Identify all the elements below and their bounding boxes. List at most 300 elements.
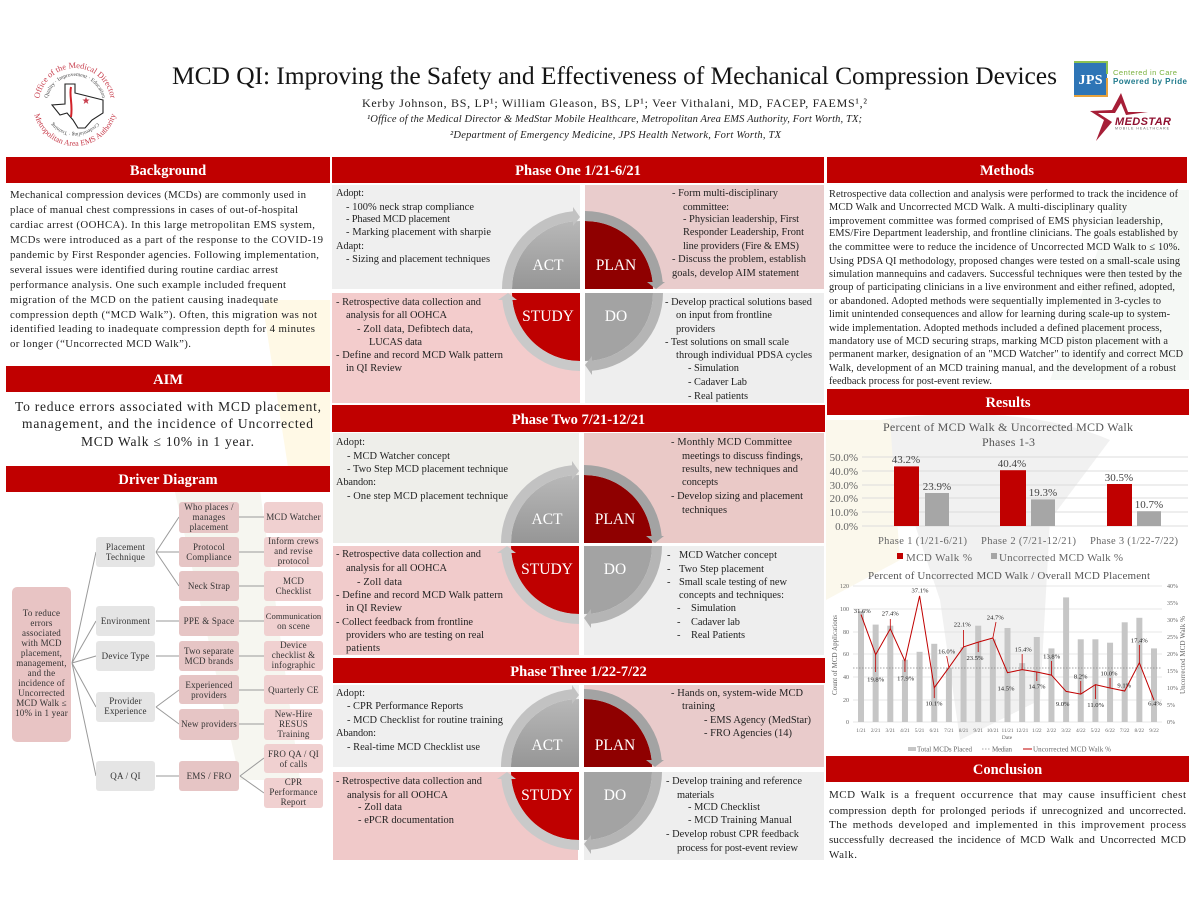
combo chart: uncorrected MCD walk over time: 8.2% — [1074, 674, 1088, 681]
PDSA cycle: DO — [604, 561, 626, 578]
combo chart: uncorrected MCD walk over time: 9/21 — [973, 728, 983, 734]
text: study: - Zoll data — [357, 577, 402, 588]
panel: conclusion — [826, 756, 1189, 861]
text: do: - MCD Training Manual — [688, 815, 792, 826]
driver: change ideas: RESUS — [279, 719, 308, 729]
combo chart: uncorrected MCD walk over time: 24.7% — [987, 614, 1004, 621]
text block: methods: the committee were to reduce the incidence of Uncorrected MCD Walk to ≤ 10%. — [829, 242, 1180, 253]
text: plan: - FRO Agencies (14) — [704, 728, 792, 739]
text block: methods: group of participating clinicians in a live environment and either refined, adopted, — [829, 282, 1175, 293]
text block: methods: improvement committee was formed comprised of EMS physician leadership, — [829, 216, 1163, 227]
text block: methods: wide implementation. Adopted methods included a defined placement process, — [829, 323, 1162, 334]
driver: secondary drivers: EMS / FRO — [187, 771, 232, 781]
combo chart: uncorrected MCD walk over time: Median — [992, 746, 1012, 754]
driver: primary drivers: Environment — [101, 616, 150, 626]
text: study: patients — [346, 643, 380, 654]
bar chart: percent of MCD walk by phase: Uncorrected MCD Walk % — [999, 552, 1123, 564]
PDSA cycle: DO — [605, 308, 627, 325]
combo chart: uncorrected MCD walk over time: 10/21 — [987, 728, 999, 734]
authors: Kerby Johnson, BS, LP¹; William Gleason, BS, LP¹; Veer Vithalani, MD, FACEP, FAEMS¹,² — [362, 96, 867, 110]
combo chart: uncorrected MCD walk over time: 9/22 — [1149, 728, 1159, 734]
panel: AIM — [6, 366, 330, 449]
heading: phase one — [332, 157, 824, 183]
combo chart: uncorrected MCD walk over time: 19.8% — [867, 676, 885, 683]
text: plan — [672, 188, 807, 279]
combo chart: uncorrected MCD walk over time: 10.1% — [925, 701, 943, 708]
combo chart: uncorrected MCD walk over time: 4/22 — [1076, 728, 1086, 734]
panel: methods — [827, 157, 1187, 387]
text: act: - MCD Checklist for routine training — [347, 715, 503, 726]
driver: primary drivers: Experience — [104, 706, 147, 716]
text: plan: - Form multi-disciplinary — [672, 188, 779, 199]
text: plan: - EMS Agency (MedStar) — [704, 715, 811, 726]
driver: root aim: MCD Walk ≤ — [16, 698, 67, 708]
combo chart: uncorrected MCD walk over time: 80 — [843, 630, 849, 636]
text: act: Adopt: — [336, 437, 365, 448]
driver: secondary drivers: PPE & Space — [184, 616, 234, 626]
text block: AIM statement: MCD Walk ≤ 10% in 1 year. — [81, 434, 254, 449]
header: logo Office of the Medical Director — [34, 62, 116, 146]
text block: methods: mandatory use of MCD securing straps, marking MCD piston placement with a — [829, 336, 1168, 347]
driver: primary drivers — [96, 537, 155, 791]
driver: secondary drivers: Who places / — [184, 502, 234, 512]
driver: root aim: with MCD — [21, 638, 62, 648]
text block: methods: feedback process for post-event review. — [829, 376, 992, 387]
text: plan — [671, 437, 803, 516]
text: study — [336, 297, 504, 374]
text block: background: several issues were identified during routine cardiac arrest — [10, 264, 278, 276]
text: act: - Phased MCD placement — [346, 214, 450, 225]
text: act: Abandon: — [336, 477, 376, 488]
text: act: - MCD Watcher concept — [347, 451, 450, 462]
text block: background: pandemic by First Responder agencies. Following implementation, — [10, 249, 319, 261]
text: study: analysis for all OOHCA — [346, 563, 447, 574]
text block: AIM statement — [15, 399, 321, 449]
combo chart: uncorrected MCD walk over time: 120 — [840, 584, 849, 590]
logo: JPS Health Network: JPS — [1078, 73, 1103, 88]
text: act: - One step MCD placement technique — [347, 491, 508, 502]
title: MCD QI: Improving the Safety and Effectiveness of Mechanical Compression Devices — [172, 61, 1057, 90]
affiliation 1: ¹Office of the Medical Director & MedStar Mobile Healthcare, Metropolitan Area EMS Authority, Fort Worth, TX; — [367, 114, 862, 125]
driver: root aim: errors — [30, 618, 53, 628]
heading: phase three: Phase Three 1/22-7/22 — [510, 664, 647, 680]
PDSA cycle: PLAN — [596, 257, 636, 274]
combo chart: uncorrected MCD walk over time: 5/22 — [1091, 728, 1100, 734]
bar chart: percent of MCD walk by phase: 40.4% — [998, 458, 1026, 470]
driver: root aim: Uncorrected — [18, 688, 65, 698]
heading: AIM — [6, 366, 330, 392]
driver: change ideas: protocol — [278, 556, 310, 566]
driver: primary drivers: Device Type — [102, 651, 149, 661]
combo chart: uncorrected MCD walk over time: 30% — [1167, 618, 1178, 624]
text: plan: Responder Leadership, Front — [683, 227, 804, 238]
text: do: - Simulation — [688, 363, 740, 374]
bar chart: percent of MCD walk by phase: MCD Walk % — [906, 552, 972, 564]
bar chart: percent of MCD walk by phase: 40.0% — [830, 466, 858, 478]
text block: methods: EMS/Fire Department leadership, and frontline clinicians. The goals established by — [829, 228, 1179, 239]
driver: secondary drivers: providers — [191, 690, 227, 700]
text: study — [336, 776, 483, 826]
text: act: - Real-time MCD Checklist use — [347, 742, 480, 753]
text: study: - Retrospective data collection and — [336, 297, 482, 308]
text: act: Abandon: — [336, 728, 376, 739]
combo chart: uncorrected MCD walk over time: 16.0% — [938, 649, 956, 656]
PDSA cycle — [497, 461, 664, 628]
combo chart: uncorrected MCD walk over time: Uncorrected MCD Walk % — [1033, 746, 1111, 754]
combo chart: uncorrected MCD walk over time: 60 — [843, 652, 849, 658]
driver: primary drivers: Technique — [106, 552, 145, 562]
driver: change ideas: Communication — [266, 611, 322, 621]
panel: phase three — [333, 658, 825, 860]
text: study: in QI Review — [346, 603, 402, 614]
PDSA cycle: ACT — [532, 257, 564, 274]
driver: root aim: 10% in 1 year — [15, 708, 68, 718]
text block: methods: limit unintended consequences and allow for learning during scale-up to system- — [829, 309, 1171, 320]
text block: conclusion: successfully decreased the incidence of MCD Walk and Uncorrected MCD — [829, 834, 1186, 846]
driver: root aim: incidence of — [18, 678, 65, 688]
text: do: - Test solutions on small scale — [665, 337, 789, 348]
text block: background: Mechanical compression devices (MCDs) are commonly used in — [10, 189, 307, 201]
header: logo Office of the Medical Director: Office of the Medical Director — [34, 62, 114, 98]
combo chart: uncorrected MCD walk over time: 40% — [1167, 584, 1178, 590]
text block: background: performance analysis. One such example included frequent — [10, 279, 286, 291]
PDSA cycle: STUDY — [521, 787, 573, 804]
text: study: analysis for all OOHCA — [346, 310, 447, 321]
combo chart: uncorrected MCD walk over time: 100 — [840, 607, 849, 613]
PDSA cycle: PLAN — [595, 511, 635, 528]
text block: conclusion: Walk. — [829, 849, 857, 861]
text: study: analysis for all OOHCA — [347, 790, 448, 801]
text block: methods: Retrospective data collection and analysis were performed to track the incidence of — [829, 189, 1179, 200]
combo chart: uncorrected MCD walk over time: 14.5% — [997, 685, 1015, 692]
text block: conclusion: compression depth for prolonged periods if unrecognized and uncorrected. — [829, 805, 1186, 817]
driver: root aim: placement, — [21, 648, 62, 658]
text: do: - Develop robust CPR feedback — [666, 829, 800, 840]
panel: background — [6, 157, 330, 350]
combo chart: uncorrected MCD walk over time: 3/22 — [1061, 728, 1071, 734]
heading: phase two: Phase Two 7/21-12/21 — [512, 412, 645, 428]
combo chart: uncorrected MCD walk over time: 12/21 — [1016, 728, 1029, 734]
panel: results — [827, 389, 1189, 754]
combo chart: uncorrected MCD walk over time: 0% — [1167, 720, 1175, 726]
text: do: on input from frontline — [676, 310, 772, 321]
bar chart: percent of MCD walk by phase: 50.0% — [830, 452, 858, 464]
logo: MedStar — [1090, 93, 1171, 141]
text: act: Adopt: — [336, 188, 364, 199]
text block: background: cardiac arrest (OOHCA). In this large metropolitan EMS system, — [10, 219, 315, 231]
text block: background: or longer (“Uncorrected MCD Walk”). — [10, 338, 191, 350]
combo chart: uncorrected MCD walk over time: Date — [1002, 735, 1013, 741]
text: do: MCD Watcher concept — [679, 550, 777, 561]
text block: background: MCDs were introduced as a part of the response to the COVID-19 — [10, 234, 323, 246]
driver: change ideas: New-Hire — [275, 709, 312, 719]
combo chart: uncorrected MCD walk over time: 17.4% — [1131, 637, 1148, 644]
text: plan: training — [682, 701, 715, 712]
bar chart: percent of MCD walk by phase — [830, 420, 1188, 564]
text block: AIM statement: management, and the incidence of Uncorrected — [22, 416, 313, 431]
driver: change ideas: of calls — [280, 759, 308, 769]
PDSA cycle — [498, 207, 665, 375]
combo chart: uncorrected MCD walk over time: 10.0% — [1100, 670, 1118, 677]
bar chart: percent of MCD walk by phase: 30.5% — [1105, 472, 1133, 484]
combo chart: uncorrected MCD walk over time: 1/22 — [1032, 728, 1042, 734]
panel: driver diagram — [6, 466, 330, 808]
text: study: - Collect feedback from frontline — [336, 617, 473, 628]
bar chart: percent of MCD walk by phase: Phase 3 (1/22-7/22) — [1090, 536, 1178, 547]
text block: methods — [829, 189, 1184, 387]
combo chart: uncorrected MCD walk over time: 11/21 — [1001, 728, 1014, 734]
text: do: - Develop practical solutions based — [665, 297, 813, 308]
driver: root aim: associated — [22, 628, 61, 638]
bar chart: percent of MCD walk by phase: 0.0% — [835, 521, 858, 533]
text: act — [336, 437, 508, 502]
bar chart: percent of MCD walk by phase: 20.0% — [830, 493, 858, 505]
driver: change ideas: MCD Watcher — [266, 512, 321, 522]
text: act — [336, 688, 503, 753]
text: do: - — [677, 603, 681, 614]
text block: methods: MCD Walk and Uncorrected MCD Walk. A multi-disciplinary quality — [829, 202, 1128, 213]
driver: change ideas — [264, 502, 323, 808]
text: act: - Marking placement with sharpie — [346, 227, 491, 238]
heading: phase two — [332, 405, 825, 432]
text: plan: - Monthly MCD Committee — [671, 437, 792, 448]
panel: phase one — [332, 157, 824, 403]
driver: secondary drivers: Neck Strap — [188, 581, 230, 591]
header: logo Office of the Medical Director: Credentialing · Training — [51, 122, 99, 136]
header: logo Office of the Medical Director: Metropolitan Area EMS Authority — [34, 113, 116, 146]
driver: secondary drivers: manages — [193, 512, 226, 522]
text block: conclusion: MCD Walk is a frequent occurrence that may cause insufficient chest — [829, 789, 1186, 801]
driver: root aim — [12, 587, 71, 742]
heading: phase three — [333, 658, 825, 683]
driver: change ideas: Report — [281, 797, 307, 807]
combo chart: uncorrected MCD walk over time: 6/22 — [1105, 728, 1115, 734]
text block: conclusion — [829, 789, 1186, 861]
PDSA cycle: ACT — [532, 737, 563, 754]
driver: change ideas: MCD — [283, 576, 304, 586]
bar chart: percent of MCD walk by phase: Phase 1 (1/21-6/21) — [878, 536, 968, 547]
text: study: in QI Review — [346, 363, 402, 374]
bar chart: percent of MCD walk by phase: 30.0% — [830, 480, 858, 492]
text: plan: line providers (Fire & EMS) — [683, 241, 799, 252]
logo: JPS Health Network: Powered by Pride — [1113, 77, 1188, 86]
text: plan: techniques — [682, 505, 727, 516]
text: do: providers — [676, 324, 715, 335]
combo chart: uncorrected MCD walk over time: 10% — [1167, 686, 1178, 692]
combo chart: uncorrected MCD walk over time: 9.1% — [1117, 683, 1132, 690]
driver: primary drivers: QA / QI — [110, 771, 141, 781]
text: plan: - Hands on, system-wide MCD — [671, 688, 803, 699]
bar chart: percent of MCD walk by phase: 10.0% — [830, 507, 858, 519]
combo chart: uncorrected MCD walk over time: 5% — [1167, 703, 1175, 709]
heading: methods — [827, 157, 1187, 183]
text: do: materials — [677, 790, 714, 801]
driver: root aim: management, — [16, 658, 67, 668]
heading: conclusion: Conclusion — [973, 762, 1042, 778]
combo chart: uncorrected MCD walk over time: 5/21 — [915, 728, 925, 734]
text block: background: migration of the MCD on the patient causing inadequate — [10, 294, 278, 306]
text: do: - — [677, 617, 681, 628]
text: plan: committee: — [683, 202, 729, 213]
combo chart: uncorrected MCD walk over time: 0 — [846, 720, 849, 726]
combo chart: uncorrected MCD walk over time: 7/21 — [944, 728, 954, 734]
PDSA cycle: STUDY — [521, 561, 573, 578]
text block: AIM statement: To reduce errors associated with MCD placement, — [15, 399, 321, 414]
heading: background — [6, 157, 330, 183]
combo chart: uncorrected MCD walk over time: 7/22 — [1120, 728, 1130, 734]
driver: primary drivers: Placement — [106, 542, 145, 552]
driver: change ideas: Device — [280, 640, 307, 650]
text: plan: goals, develop AIM statement — [672, 268, 799, 279]
text block: background: compression depth (“MCD Walk”). Often, this migration was not — [10, 309, 317, 321]
text: do: Cadaver lab — [691, 617, 740, 628]
bar chart: percent of MCD walk by phase: 10.7% — [1135, 499, 1163, 511]
text: do: Simulation — [691, 603, 737, 614]
bar chart: percent of MCD walk by phase: 19.3% — [1029, 487, 1057, 499]
heading: AIM: AIM — [153, 372, 183, 388]
heading: driver diagram: Driver Diagram — [118, 472, 218, 488]
text: do: - — [667, 577, 671, 588]
text: act: - 100% neck strap compliance — [346, 202, 474, 213]
text: plan: - Discuss the problem, establish — [672, 254, 807, 265]
driver: root aim: and the — [28, 668, 55, 678]
text: do: - Cadaver Lab — [688, 377, 747, 388]
combo chart: uncorrected MCD walk over time: 3/21 — [886, 728, 895, 734]
combo chart: uncorrected MCD walk over time: 11.0% — [1087, 702, 1105, 709]
driver: secondary drivers: MCD brands — [185, 656, 234, 666]
driver: change ideas: Checklist — [276, 586, 312, 596]
text: study: - Retrospective data collection and — [336, 549, 482, 560]
text block: methods: Walk, development of an MCD training manual, and the development of a robust — [829, 363, 1176, 374]
PDSA cycle: PLAN — [595, 737, 635, 754]
text: plan: - Develop sizing and placement — [671, 491, 803, 502]
logo: JPS Health Network — [1074, 62, 1188, 96]
combo chart: uncorrected MCD walk over time: Count of MCD Applications — [831, 615, 839, 695]
text: plan: meetings to discuss findings, — [682, 451, 803, 462]
bar chart: percent of MCD walk by phase: Phases 1-3 — [982, 435, 1035, 449]
quadrant backgrounds — [332, 185, 824, 403]
panel: phase two — [332, 405, 825, 655]
text block: background: place of manual chest compressions in cases of out-of-hospital — [10, 204, 298, 216]
text block: methods: simulation mannequins and cadavers. Successful techniques were then tested by the — [829, 269, 1182, 280]
PDSA cycle: ACT — [532, 511, 563, 528]
driver: change ideas: Performance — [269, 787, 318, 797]
text block: methods: Using PDSA QI methodology, proposed changes were tested on a small-scale using — [829, 256, 1180, 267]
text: study: - ePCR documentation — [358, 815, 455, 826]
driver: change ideas: and revise — [274, 546, 313, 556]
text block: background — [10, 189, 323, 350]
text: do: - MCD Checklist — [688, 802, 760, 813]
combo chart: uncorrected MCD walk over time — [831, 570, 1187, 754]
text block: conclusion: The methods developed and implemented in this improvement process — [829, 819, 1186, 831]
combo chart: uncorrected MCD walk over time: Uncorrected MCD Walk % — [1179, 616, 1187, 694]
logo: MedStar: MOBILE HEALTHCARE — [1115, 126, 1170, 130]
text: act: Adapt: — [336, 241, 364, 252]
driver: root aim: To reduce — [23, 608, 60, 618]
text: plan — [671, 688, 811, 739]
text: study: - Zoll data, Defibtech data, — [357, 324, 473, 335]
heading: driver diagram — [6, 466, 330, 492]
combo chart: uncorrected MCD walk over time: 4/21 — [900, 728, 910, 734]
text: act: - CPR Performance Reports — [347, 701, 463, 712]
text: do: Small scale testing of new — [679, 577, 787, 588]
text: act — [336, 188, 491, 265]
heading: results — [827, 389, 1189, 415]
text: do: Two Step placement — [679, 564, 764, 575]
combo chart: uncorrected MCD walk over time: 31.6% — [854, 608, 871, 615]
text: plan: - Physician leadership, First — [683, 214, 799, 225]
logo: MedStar: MEDSTAR — [1115, 116, 1171, 128]
driver: secondary drivers — [179, 502, 239, 791]
text: study: - Zoll data — [358, 802, 402, 813]
combo chart: uncorrected MCD walk over time: 37.1% — [911, 588, 929, 595]
combo chart: uncorrected MCD walk over time: 9.0% — [1056, 701, 1070, 708]
text: study: - Retrospective data collection and — [336, 776, 483, 787]
driver: change ideas: on scene — [277, 621, 310, 631]
affiliation 2: ²Department of Emergency Medicine, JPS Health Network, Fort Worth, TX — [450, 130, 782, 141]
text: study — [336, 549, 504, 654]
combo chart: uncorrected MCD walk over time: 15.4% — [1015, 647, 1032, 654]
PDSA cycle — [497, 685, 664, 854]
heading: phase one: Phase One 1/21-6/21 — [515, 163, 641, 179]
text: do: concepts and techniques: — [679, 590, 784, 601]
text: do — [666, 776, 802, 854]
text: do: through individual PDSA cycles — [676, 350, 812, 361]
driver: change ideas: FRO QA / QI — [268, 749, 319, 759]
combo chart: uncorrected MCD walk over time: 27.4% — [882, 611, 899, 618]
combo chart: uncorrected MCD walk over time: 13.8% — [1043, 654, 1061, 661]
combo chart: uncorrected MCD walk over time: 20% — [1167, 652, 1178, 658]
text: act: - Sizing and placement techniques — [346, 254, 490, 265]
driver: secondary drivers: Protocol — [193, 542, 225, 552]
driver: secondary drivers: placement — [190, 522, 229, 532]
text: do — [667, 550, 787, 641]
combo chart: uncorrected MCD walk over time: Percent of Uncorrected MCD Walk / Overall MCD Placement — [868, 570, 1150, 582]
combo chart: uncorrected MCD walk over time: Total MCDs Placed — [917, 746, 972, 754]
combo chart: uncorrected MCD walk over time: 22.1% — [954, 621, 971, 628]
text: act: Adopt: — [336, 688, 365, 699]
driver: change ideas: infographic — [272, 660, 315, 670]
driver: change ideas: Training — [277, 729, 310, 739]
quadrant backgrounds — [333, 685, 824, 860]
text: study: LUCAS data — [369, 337, 422, 348]
combo chart: uncorrected MCD walk over time: 25% — [1167, 635, 1178, 641]
PDSA cycle: STUDY — [522, 308, 574, 325]
combo chart: uncorrected MCD walk over time: 23.5% — [966, 655, 984, 662]
driver: change ideas: checklist & — [272, 650, 315, 660]
text block: methods: or abandoned. Adopted methods were sequentially implemented in 3-cycles to — [829, 296, 1161, 307]
connectors — [72, 517, 264, 793]
combo chart: uncorrected MCD walk over time: 35% — [1167, 601, 1178, 607]
bar chart: percent of MCD walk by phase: Percent of MCD Walk & Uncorrected MCD Walk — [883, 420, 1133, 434]
text: do: - Develop training and reference — [666, 776, 802, 787]
driver: change ideas: Quarterly CE — [268, 685, 319, 695]
driver: secondary drivers: New providers — [181, 719, 237, 729]
logo: JPS Health Network: Centered in Care — [1113, 68, 1177, 77]
bar chart: percent of MCD walk by phase: 43.2% — [892, 454, 920, 466]
PDSA cycle: DO — [604, 787, 626, 804]
text: do: - — [677, 630, 681, 641]
bar chart: percent of MCD walk by phase: Phase 2 (7/21-12/21) — [981, 536, 1076, 547]
quadrant backgrounds — [333, 433, 824, 655]
combo chart: uncorrected MCD walk over time: 2/22 — [1047, 728, 1057, 734]
text block: background: identified leading to inadequate compression depth for 4 minutes — [10, 323, 315, 335]
bar chart: percent of MCD walk by phase: 23.9% — [923, 481, 951, 493]
heading: background: Background — [130, 163, 206, 179]
text: plan: results, new techniques and — [682, 464, 799, 475]
driver: secondary drivers: Experienced — [185, 680, 233, 690]
combo chart: uncorrected MCD walk over time: 15% — [1167, 669, 1178, 675]
